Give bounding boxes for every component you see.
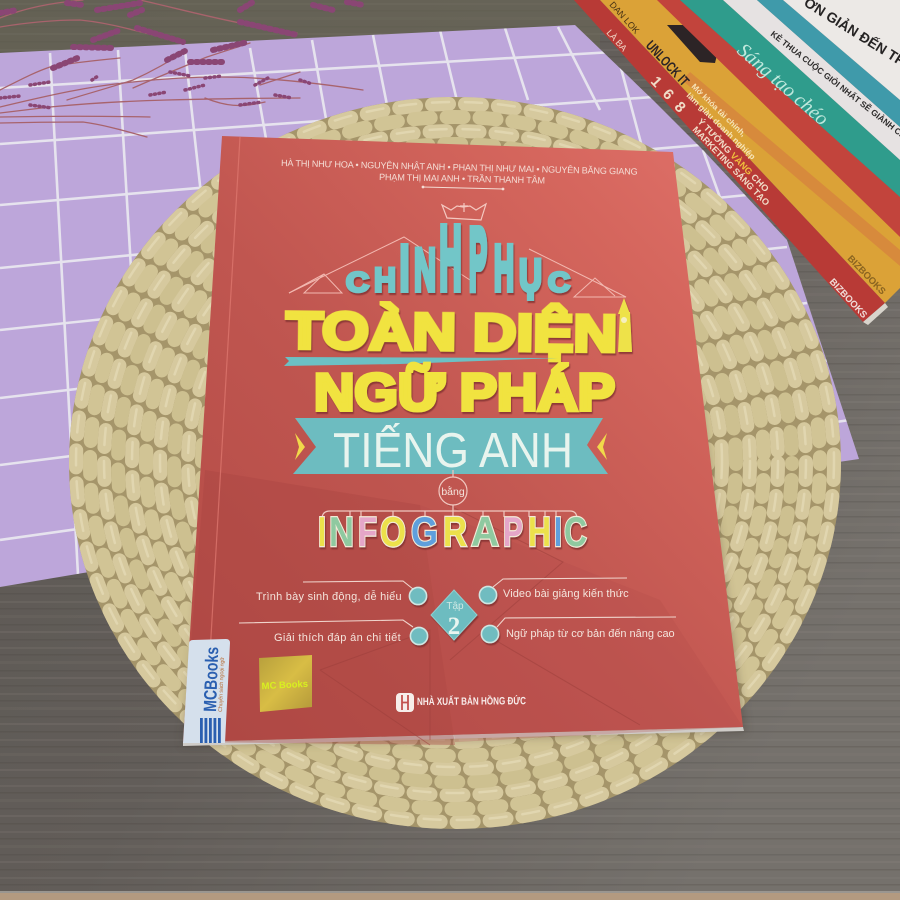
- spine text: lam giau doanh nghiep: làm giàu doanh nghiệp: [685, 91, 757, 161]
- volume diamond: [431, 590, 477, 640]
- heading: Infographic: I: [554, 508, 562, 555]
- feature: Giai thich dap an: Giải thích đáp án chi tiết: [274, 632, 401, 644]
- spine text: Bizbooks red: BIZBOOKS: [827, 277, 869, 321]
- heading: Chinh Phuc: N: [414, 236, 436, 304]
- heading: Chinh Phuc: H: [374, 262, 396, 300]
- stack of books: [574, 0, 900, 325]
- heading: Chinh Phuc: C: [346, 266, 369, 298]
- spine text: Dan Lok: DAN LOK: [608, 0, 641, 36]
- mountain outlines: [289, 237, 626, 297]
- ribbon banner: [293, 418, 608, 478]
- heading: Infographic: F: [358, 508, 377, 555]
- spine text: Mo khoa tai chinh: Mở khóa tài chính,: [690, 82, 748, 138]
- authors line 2: PHẠM THỊ MAI ANH • TRẦN THANH TÂM: [379, 172, 545, 185]
- feature: Video bai giang: Video bài giảng kiến thức: [503, 588, 629, 600]
- authors line 1: HÀ THỊ NHƯ HOA • NGUYÊN NHẬT ANH • PHAN THỊ NHƯ MAI • NGUYÊN BĂNG GIANG: [281, 158, 638, 177]
- publisher side label: [183, 639, 230, 743]
- volume diamond: 2: [448, 613, 460, 640]
- book shadow: [183, 400, 745, 745]
- woven straw mat: [69, 97, 841, 829]
- heading: Chinh Phuc: P: [469, 211, 487, 308]
- icon: clock tower: [618, 298, 632, 352]
- hologram sticker: [259, 655, 312, 712]
- heading: Infographic: N: [329, 508, 354, 555]
- dried flower twigs: [0, 0, 363, 137]
- heading: Chinh Phuc: H: [494, 232, 514, 304]
- blue stripes: [200, 718, 221, 743]
- heading: Infographic: [318, 508, 587, 555]
- feature: Ngu phap tu co ban: Ngữ pháp từ cơ bản đến nâng cao: [506, 628, 675, 640]
- teal swoosh: [284, 357, 558, 366]
- heading: Infographic: I: [318, 508, 326, 555]
- heading: Infographic: O: [380, 508, 406, 555]
- spine text: Bizbooks yellow: BIZBOOKS: [845, 253, 888, 297]
- heading: Tieng Anh: TIẾNG ANH: [333, 424, 573, 478]
- purple grid sheet: [0, 25, 859, 587]
- heading: Chinh Phuc: Ụ: [519, 250, 542, 301]
- hologram sticker: MC Books: [261, 679, 308, 692]
- spine text: Marketing sang tao: MARKETING SÁNG TẠO: [691, 124, 771, 208]
- book: [183, 136, 744, 746]
- heading: Infographic: R: [443, 508, 467, 555]
- icon: publisher logo: [396, 693, 414, 712]
- spine text: Y tuong vang cho: Ý TƯỞNG VÀNG CHO: [696, 116, 772, 194]
- connector tree: [322, 470, 577, 519]
- small divider: [422, 186, 504, 190]
- MCBooks logo text: MCBooks: [200, 646, 222, 712]
- heading: Infographic: P: [503, 508, 523, 555]
- cover geometric shading: [183, 137, 743, 745]
- right chevron: [597, 433, 607, 460]
- spine text: authors: LÀ BA: [605, 28, 629, 53]
- heading: Infographic: C: [564, 508, 587, 555]
- feature leader lines: [239, 578, 676, 627]
- spine text: Unlock It: UNLOCK IT: [643, 37, 693, 89]
- tagline: Chuyên sách ngoại ngữ: [218, 657, 226, 712]
- heading: Toan Dien: TOÀN DIỆN: [286, 301, 617, 363]
- feature bullets: [409, 586, 499, 645]
- crown icon: [442, 203, 486, 220]
- publisher name: NHÀ XUẤT BẢN HỒNG ĐỨC: [417, 694, 526, 708]
- heading: Chinh Phuc: I: [399, 231, 410, 306]
- heading: Chinh Phuc: H: [440, 209, 462, 309]
- heading: Ngu Phap: NGỮ PHÁP: [314, 363, 615, 422]
- spine text: Sang tao cheo: Sáng tạo chéo: [733, 39, 833, 130]
- bang circle: [439, 477, 467, 505]
- heading: Infographic: A: [471, 508, 499, 555]
- volume diamond: Tập: [446, 601, 464, 612]
- heading: Infographic: H: [528, 508, 551, 555]
- publisher: [396, 693, 526, 712]
- spine text: 168: 168: [647, 73, 695, 123]
- left chevron: [295, 433, 305, 460]
- book cover: [183, 136, 743, 742]
- heading: Chinh Phuc: C: [548, 266, 570, 298]
- heading: Infographic: G: [411, 508, 438, 555]
- heading: Chinh Phuc: [346, 209, 570, 309]
- feature: Trinh bay sinh dong: Trình bày sinh động, dễ hiểu: [256, 590, 402, 603]
- book page edge: [183, 727, 744, 746]
- bang circle: bằng: [441, 485, 465, 498]
